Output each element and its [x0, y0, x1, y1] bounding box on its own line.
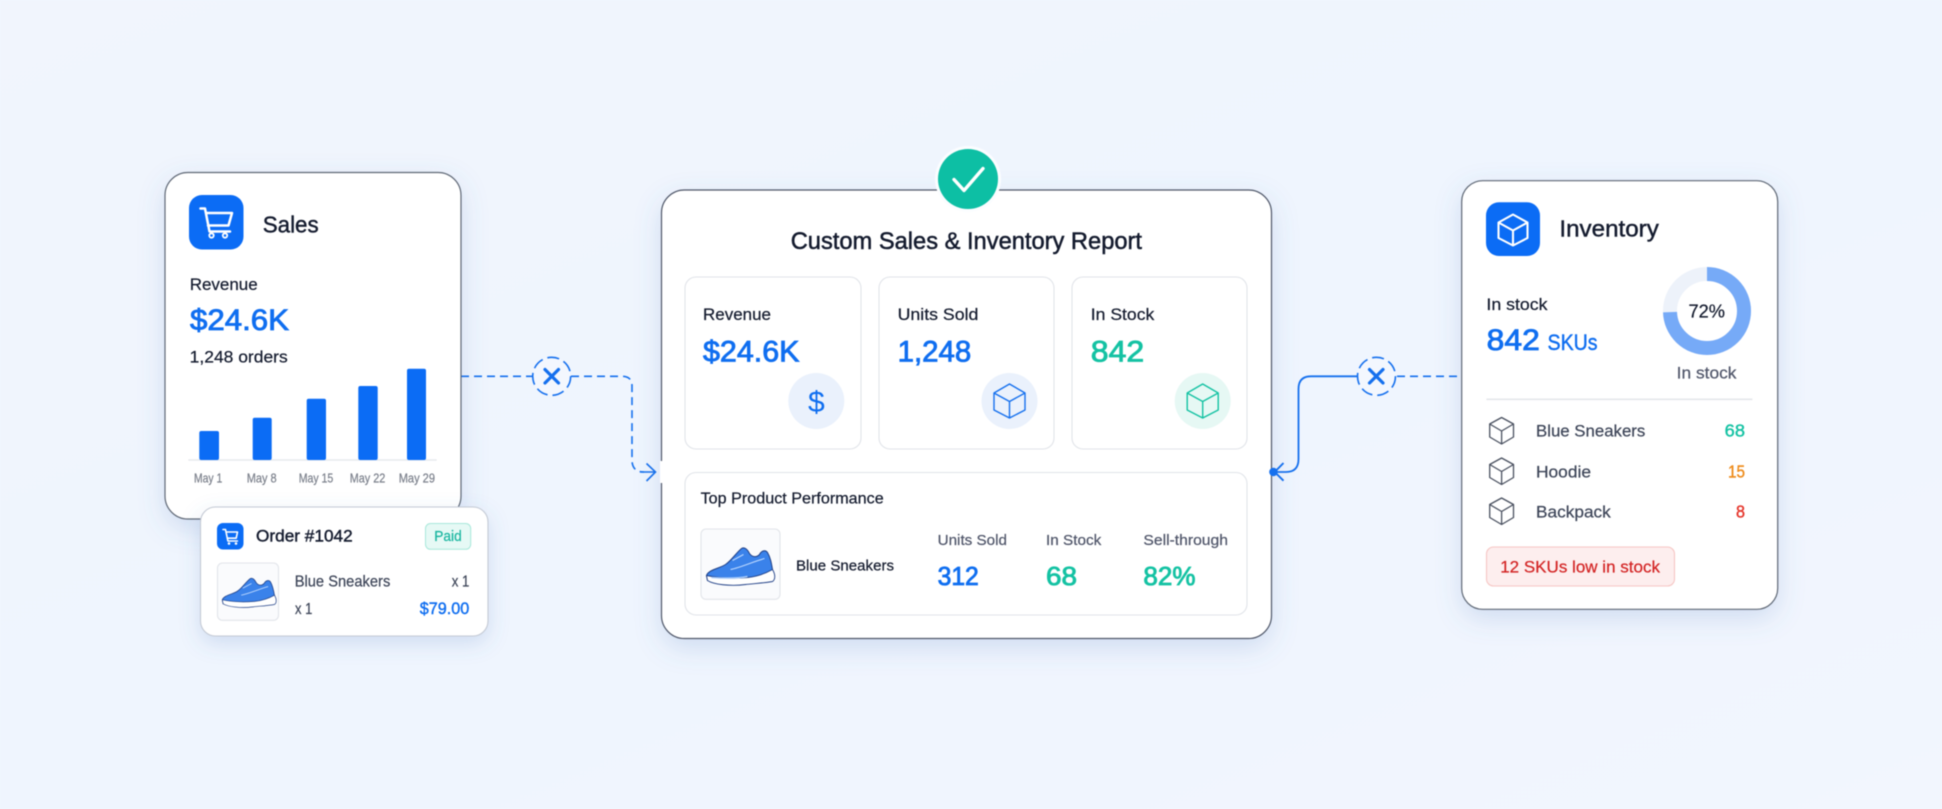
bar chart: May 8: [247, 471, 277, 485]
title: Custom Sales & Inventory Report: [791, 228, 1142, 255]
kpi: revenue: $: [808, 386, 825, 419]
panel: inventory: [1462, 181, 1778, 609]
icon: order cart: [217, 523, 244, 550]
alert: low stock: [1486, 547, 1674, 586]
row: blue sneakers: Blue Sneakers: [1536, 422, 1645, 441]
donut chart: [1670, 274, 1744, 382]
value: skus: 842: [1487, 324, 1540, 357]
row: hoodie: 15: [1728, 461, 1745, 481]
metric: sell-through: [1143, 532, 1228, 591]
kpi: revenue: [685, 277, 861, 449]
metric: sell-through: Sell-through: [1143, 532, 1228, 549]
row: backpack: Backpack: [1536, 503, 1611, 522]
metric: units sold: 312: [938, 561, 979, 591]
bar chart: May 1: [194, 471, 222, 485]
bar chart: May 29: [399, 471, 435, 485]
text: product name: Blue Sneakers: [796, 558, 894, 575]
metric: in stock: [1046, 532, 1102, 591]
connector: sales to report: [461, 357, 656, 481]
row: backpack: [1490, 498, 1745, 524]
row: hoodie: [1490, 458, 1745, 484]
value: revenue: $24.6K: [190, 304, 289, 337]
bar chart: May 15: [299, 471, 333, 485]
donut chart: 72%: [1688, 301, 1725, 321]
text: price: $79.00: [420, 599, 469, 618]
panel: top product performance: [685, 472, 1247, 615]
panel: report: [662, 146, 1272, 638]
kpi: in stock: In Stock: [1091, 306, 1155, 324]
bar chart: [188, 369, 437, 485]
alert: low stock: 12 SKUs low in stock: [1500, 558, 1660, 577]
row: hoodie: Hoodie: [1536, 462, 1591, 481]
connector: inventory to report: [1276, 357, 1462, 472]
kpi: units sold: 1,248: [898, 336, 971, 369]
bar chart: May 22: [350, 471, 385, 485]
row: blue sneakers: 68: [1725, 421, 1745, 441]
kpi: units sold: Units Sold: [898, 306, 978, 324]
value: skus: SKUs: [1548, 330, 1598, 355]
heading: sales: Sales: [263, 211, 319, 237]
label: orders: 1,248 orders: [190, 347, 288, 366]
row: blue sneakers: [1490, 418, 1745, 444]
panel: sales: [165, 172, 461, 519]
badge: paid: [426, 524, 471, 549]
product thumbnail: sneaker: [701, 529, 780, 599]
row: backpack: 8: [1736, 502, 1745, 522]
text: product name: Blue Sneakers: [295, 573, 390, 590]
heading: order number: Order #1042: [256, 527, 353, 546]
kpi: in stock: [1072, 277, 1247, 449]
panel: order card: [200, 507, 488, 636]
value: skus: [1487, 324, 1598, 357]
icon: check badge: [935, 146, 1001, 212]
metric: in stock: 68: [1046, 561, 1077, 591]
metric: units sold: [938, 532, 1007, 591]
label: revenue: Revenue: [190, 275, 258, 294]
heading: inventory: Inventory: [1559, 216, 1659, 242]
kpi: revenue: $24.6K: [703, 336, 800, 369]
badge: paid: Paid: [434, 529, 462, 545]
donut chart: In stock: [1677, 364, 1737, 382]
kpi: units sold: [879, 277, 1054, 449]
kpi: revenue: Revenue: [703, 306, 771, 324]
product thumbnail: sneaker: [218, 563, 278, 620]
arrow: inventory connector head: [1269, 463, 1284, 481]
icon: sales cart: [189, 195, 244, 250]
metric: in stock: In Stock: [1046, 532, 1102, 549]
text: quantity right: x 1: [452, 573, 469, 590]
kpi: in stock: 842: [1091, 336, 1144, 369]
metric: sell-through: 82%: [1143, 561, 1196, 591]
heading: top product: Top Product Performance: [701, 490, 884, 507]
metric: units sold: Units Sold: [938, 532, 1007, 549]
icon: inventory box: [1486, 202, 1540, 256]
text: quantity left: x 1: [295, 601, 312, 618]
label: in stock: In stock: [1486, 295, 1548, 314]
